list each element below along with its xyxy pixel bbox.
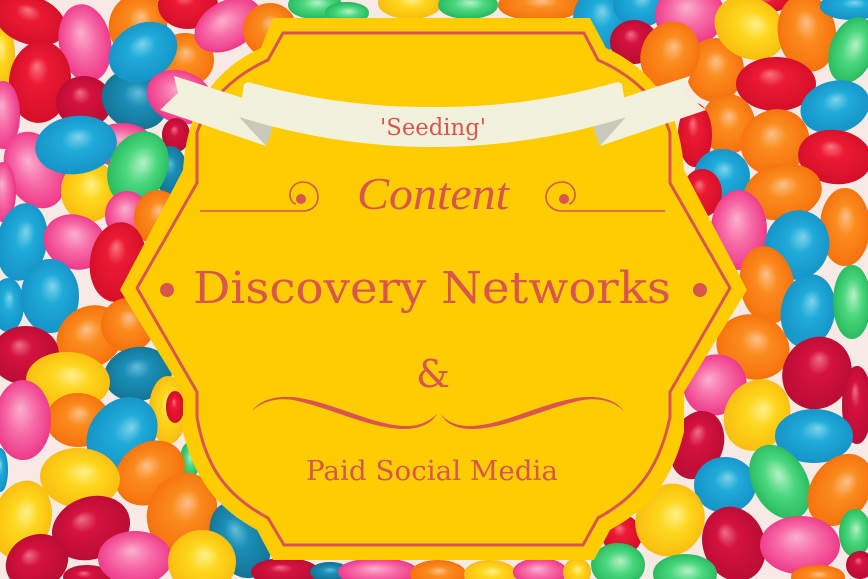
ampersand: & — [416, 352, 450, 396]
heading: Content: Content — [357, 168, 510, 219]
ribbon banner — [160, 76, 706, 147]
badge inner outline — [137, 33, 730, 545]
ribbon left fold — [239, 117, 272, 146]
right flourish — [546, 182, 665, 211]
right dot — [693, 283, 707, 297]
ribbon right fold — [594, 117, 626, 146]
subheading: Paid Social Media: Paid Social Media — [306, 456, 558, 487]
ribbon left tail — [160, 76, 272, 146]
badge shape — [120, 18, 747, 560]
heading: Discovery Networks: Discovery Networks — [193, 263, 671, 314]
panel: yellow badge — [120, 18, 747, 560]
left flourish — [200, 182, 318, 211]
moustache flourish — [252, 397, 624, 429]
left dot — [160, 283, 174, 297]
ribbon right tail — [594, 76, 706, 146]
ribbon text: 'Seeding' — [380, 115, 486, 141]
ribbon main band — [239, 82, 627, 147]
